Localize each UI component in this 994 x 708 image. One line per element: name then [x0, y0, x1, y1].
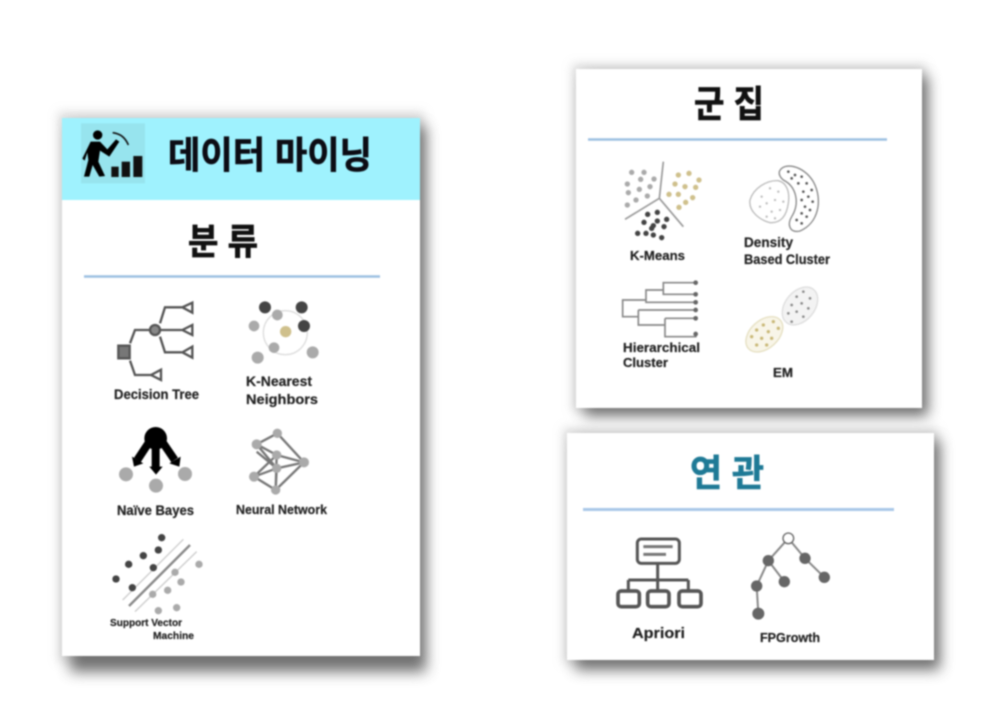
label: EM: EM — [773, 365, 793, 380]
label: Hierarchical Cluster: Hierarchical — [623, 340, 700, 355]
label: Support Vector Machine: Machine — [153, 631, 194, 642]
heading rule — [583, 508, 894, 511]
label: Neural Network: Neural Network — [236, 502, 328, 517]
icon: decision tree — [118, 303, 192, 380]
icon: support vector machine — [112, 534, 203, 614]
icon: neural network — [249, 429, 309, 495]
icon: density based cluster — [750, 166, 818, 231]
panel: classification — [58, 112, 426, 672]
heading rule — [588, 138, 887, 141]
label: Density Based Cluster: Based Cluster — [744, 251, 830, 267]
heading rule — [84, 275, 380, 278]
label: K-Nearest Neighbors: K-Nearest — [246, 373, 312, 389]
icon: FP growth tree — [751, 533, 830, 620]
label: K-Means: K-Means — [630, 248, 685, 263]
label: Support Vector Machine: Support Vector — [110, 618, 182, 629]
label: Hierarchical Cluster: Cluster — [623, 355, 668, 370]
heading: association: 연 관 — [690, 453, 764, 494]
icon: k-nearest neighbors — [249, 301, 319, 364]
label: FPGrowth: FPGrowth — [760, 631, 820, 645]
label: K-Nearest Neighbors: Neighbors — [246, 391, 318, 407]
panel: association — [563, 428, 940, 670]
panel: clustering — [572, 64, 928, 416]
label: Naive Bayes: Naïve Bayes — [117, 502, 194, 518]
label: Decision Tree: Decision Tree — [114, 386, 199, 402]
main title: 데이터 마이닝 — [168, 135, 372, 176]
icon: hierarchical cluster — [623, 280, 698, 337]
icon: EM — [739, 280, 825, 359]
icon: k-means — [625, 162, 702, 240]
icon: naive bayes — [119, 427, 192, 493]
heading: classification: 분 류 — [188, 221, 258, 262]
icon: apriori hierarchy — [618, 539, 701, 607]
heading: clustering: 군 집 — [694, 84, 764, 125]
header band — [62, 118, 420, 200]
icon: miner with bar chart — [81, 123, 145, 183]
label: Apriori: Apriori — [632, 625, 685, 642]
label: Density Based Cluster: Density — [744, 234, 793, 250]
